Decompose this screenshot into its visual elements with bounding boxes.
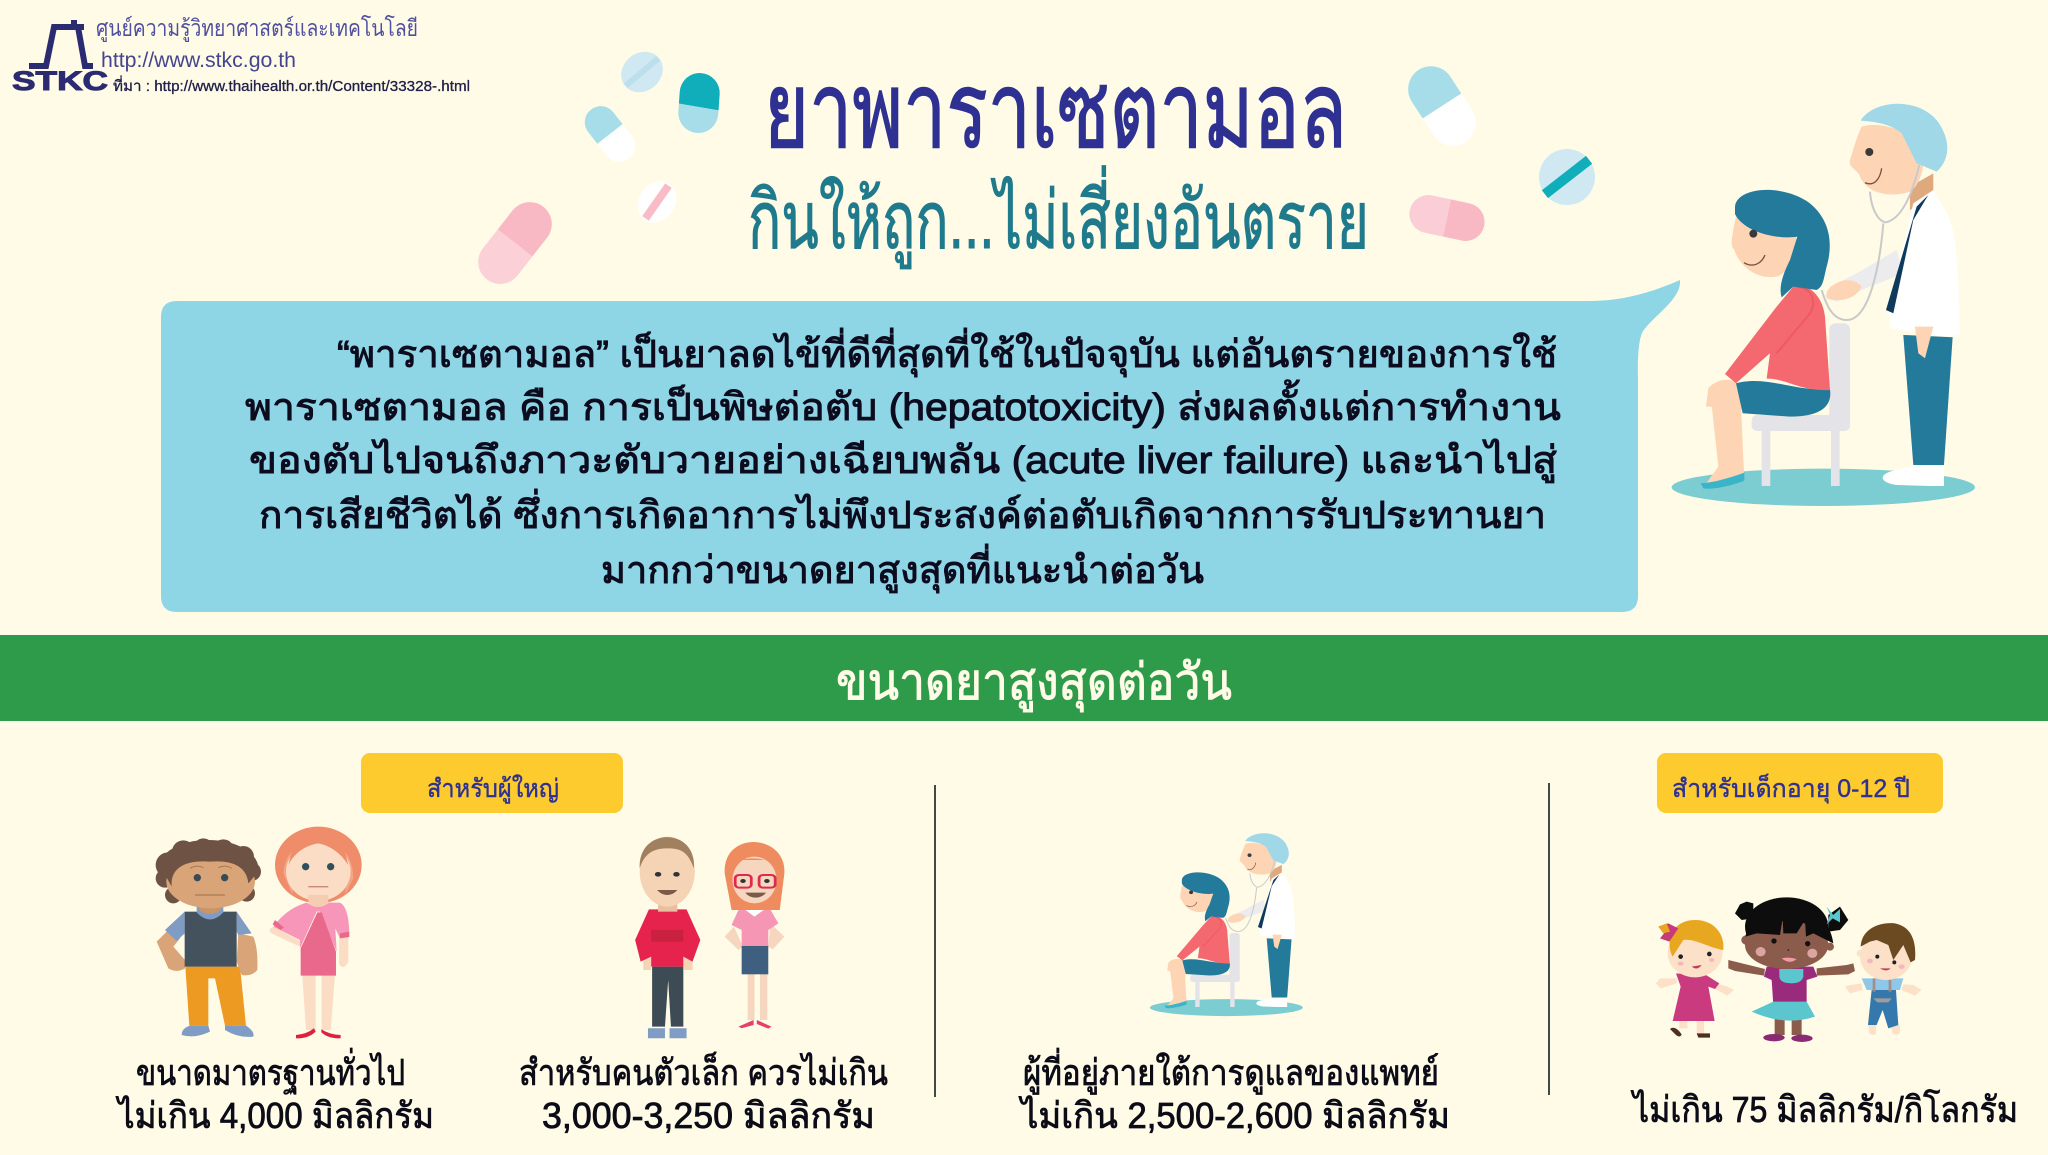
website url: http://www.stkc.go.th [101, 49, 296, 72]
text: small-bodied dose: สำหรับคนตัวเล็ก ควรไม่เกิน [519, 1050, 888, 1093]
illustration: three children [1656, 897, 1922, 1042]
intro text: “พาราเซตามอล” เป็นยาลดไข้ที่ดีที่สุดที่ใช้ในปัจจุบัน แต่อันตรายของการใช้ [337, 328, 1557, 377]
source line: ที่มา : http://www.thaihealth.or.th/Content/33328-.html [113, 75, 470, 95]
icon: large blue white capsule [1399, 57, 1485, 155]
icon: striped round pill [1528, 138, 1606, 216]
text: doctor-supervised dose [1018, 1048, 1450, 1136]
title: ยาพาราเซตามอล [764, 52, 1347, 170]
text: standard dose: ขนาดมาตรฐานทั่วไป [136, 1048, 405, 1095]
text: standard dose: ไม่เกิน 4,000 มิลลิกรัม [115, 1095, 434, 1136]
intro text: พาราเซตามอล คือ การเป็นพิษต่อตับ (hepatotoxicity) ส่งผลตั้งแต่การทำงาน [245, 379, 1561, 429]
icon: big pink capsule [469, 193, 561, 293]
illustration: small-bodied adults [635, 837, 784, 1038]
illustration: doctor and patient small [1150, 833, 1303, 1016]
woman with glasses [725, 842, 784, 1029]
badge: children [1657, 753, 1943, 813]
woman in pink [270, 827, 362, 1038]
intro text [245, 328, 1561, 593]
icon: pink capsule [1406, 192, 1488, 244]
decorative pills [469, 43, 1606, 293]
icon: round blue pill [613, 43, 671, 101]
boy in overalls [1845, 923, 1922, 1035]
badge: adults [361, 753, 623, 813]
organisation name: ศูนย์ความรู้วิทยาศาสตร์และเทคโนโลยี [96, 15, 418, 42]
text: doctor-supervised dose: ผู้ที่อยู่ภายใต้การดูแลของแพทย์ [1023, 1048, 1439, 1095]
divider [1548, 783, 1550, 1095]
text: doctor-supervised dose: ไม่เกิน 2,500-2,600 มิลลิกรัม [1018, 1095, 1450, 1136]
icon: blue white capsule [578, 100, 642, 168]
divider [934, 785, 936, 1097]
badge: children: สำหรับเด็กอายุ 0-12 ปี [1672, 773, 1910, 804]
intro text: ของตับไปจนถึงภาวะตับวายอย่างเฉียบพลัน (acute liver failure) และนำไปสู่ [249, 439, 1557, 483]
icon: STKC logo [12, 20, 108, 96]
intro text: การเสียชีวิตได้ ซึ่งการเกิดอาการไม่พึงประสงค์ต่อตับเกิดจากการรับประทานยา [259, 489, 1546, 537]
illustration: standard adults [156, 827, 362, 1038]
text: standard dose [115, 1048, 434, 1136]
logo and source header [12, 15, 470, 96]
man with curly hair [156, 838, 261, 1037]
text: small-bodied dose [519, 1050, 888, 1136]
intro text: มากกว่าขนาดยาสูงสุดที่แนะนำต่อวัน [601, 544, 1204, 593]
man in red sweater [635, 837, 700, 1038]
heading band [0, 635, 2048, 721]
dark-skinned girl [1728, 897, 1855, 1042]
icon: white pink pill [630, 174, 684, 230]
band heading text: ขนาดยาสูงสุดต่อวัน [836, 654, 1232, 712]
blonde girl [1656, 920, 1734, 1038]
panel: speech bubble intro [161, 280, 1680, 612]
subtitle: กินให้ถูก...ไม่เสี่ยงอันตราย [748, 166, 1369, 269]
text: small-bodied dose: 3,000-3,250 มิลลิกรัม [542, 1095, 875, 1136]
illustration: doctor examining patient [1672, 104, 1975, 506]
icon: STKC logo: STKC [12, 66, 108, 96]
badge: adults: สำหรับผู้ใหญ่ [427, 774, 559, 804]
icon: teal capsule [677, 72, 721, 134]
